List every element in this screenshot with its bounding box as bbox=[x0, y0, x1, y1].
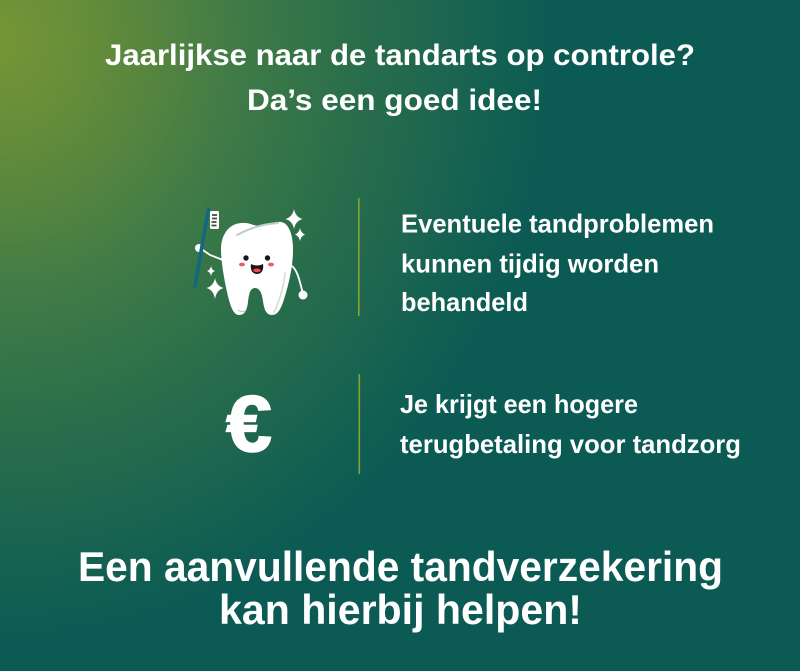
divider 1 bbox=[358, 198, 360, 316]
closing statement: kan hierbij helpen! bbox=[219, 586, 582, 633]
tooth arm right bbox=[290, 265, 303, 294]
title: Da’s een goed idee! bbox=[247, 84, 542, 117]
title: Jaarlijkse naar de tandarts op controle? bbox=[105, 39, 695, 72]
text: terugbetaling: terugbetaling voor tandzorg bbox=[400, 429, 741, 459]
text: terugbetaling: Je krijgt een hogere bbox=[400, 389, 638, 419]
closing statement: Een aanvullende tandverzekering bbox=[78, 543, 723, 590]
tooth face bbox=[239, 255, 274, 274]
title bbox=[105, 39, 695, 117]
icon: smiling tooth with toothbrush bbox=[195, 209, 308, 315]
text: tandproblemen: behandeld bbox=[401, 287, 528, 317]
text: tandproblemen: kunnen tijdig worden bbox=[401, 248, 659, 278]
divider 2 bbox=[358, 374, 360, 474]
sparkles bbox=[206, 209, 305, 299]
tooth highlights bbox=[237, 223, 278, 235]
tooth arm left bbox=[200, 248, 223, 260]
tooth body bbox=[221, 222, 293, 315]
toothbrush bbox=[195, 209, 219, 286]
icon: euro sign: € bbox=[226, 379, 272, 468]
closing statement bbox=[78, 543, 723, 633]
text: tandproblemen bbox=[401, 208, 714, 317]
text: terugbetaling bbox=[400, 389, 741, 459]
text: tandproblemen: Eventuele tandproblemen bbox=[401, 208, 714, 238]
